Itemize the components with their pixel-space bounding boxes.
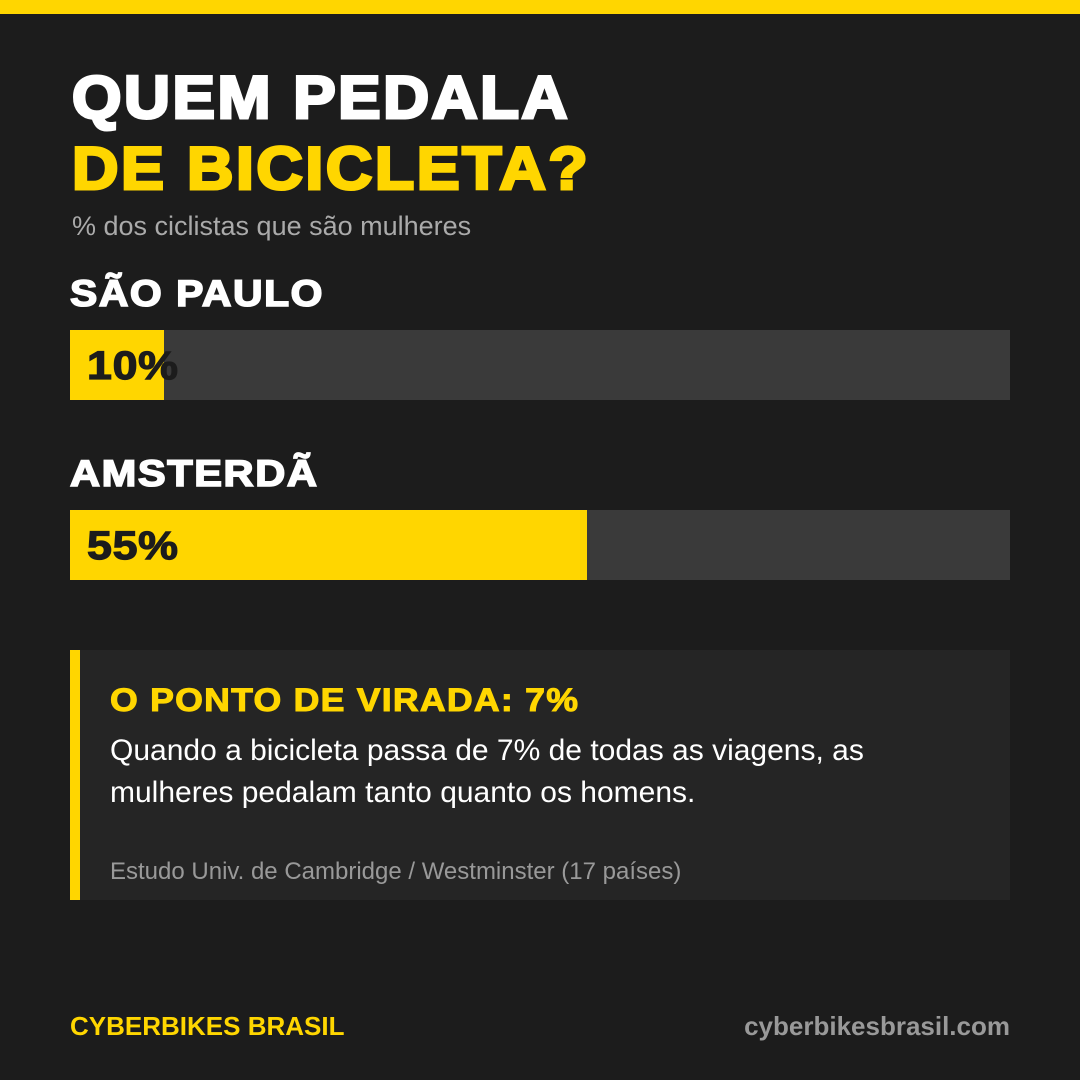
top accent bar: [0, 0, 1080, 14]
callout body: [110, 734, 864, 809]
callout body: mulheres pedalam tanto quanto os homens.: [110, 776, 695, 809]
footer brand: CYBERBIKES BRASIL: [70, 1011, 344, 1041]
subtitle: % dos ciclistas que são mulheres: [72, 211, 471, 241]
footer url: cyberbikesbrasil.com: [744, 1011, 1010, 1041]
callout accent border: [70, 650, 80, 900]
value 10%: 10%: [87, 344, 179, 388]
title line 2: DE BICICLETA?: [72, 135, 590, 202]
panel: Amsterdã: [70, 452, 1010, 580]
title line 1: QUEM PEDALA: [72, 64, 570, 131]
title: [72, 64, 590, 202]
value 55%: 55%: [87, 524, 179, 568]
callout body: Quando a bicicleta passa de 7% de todas as viagens, as: [110, 734, 864, 767]
label: São Paulo: SÃO PAULO: [70, 273, 324, 314]
bar fill 55%: [70, 510, 587, 580]
callout heading: O PONTO DE VIRADA: 7%: [110, 682, 579, 718]
label: Amsterdã: AMSTERDÃ: [70, 453, 318, 494]
panel: São Paulo: [70, 272, 1010, 400]
callout: tipping point: [70, 650, 1010, 900]
callout source: Estudo Univ. de Cambridge / Westminster (17 países): [110, 858, 681, 885]
bar fill 10%: [70, 330, 164, 400]
bar: São Paulo 10%: [70, 330, 1010, 400]
bar: Amsterdã 55%: [70, 510, 1010, 580]
